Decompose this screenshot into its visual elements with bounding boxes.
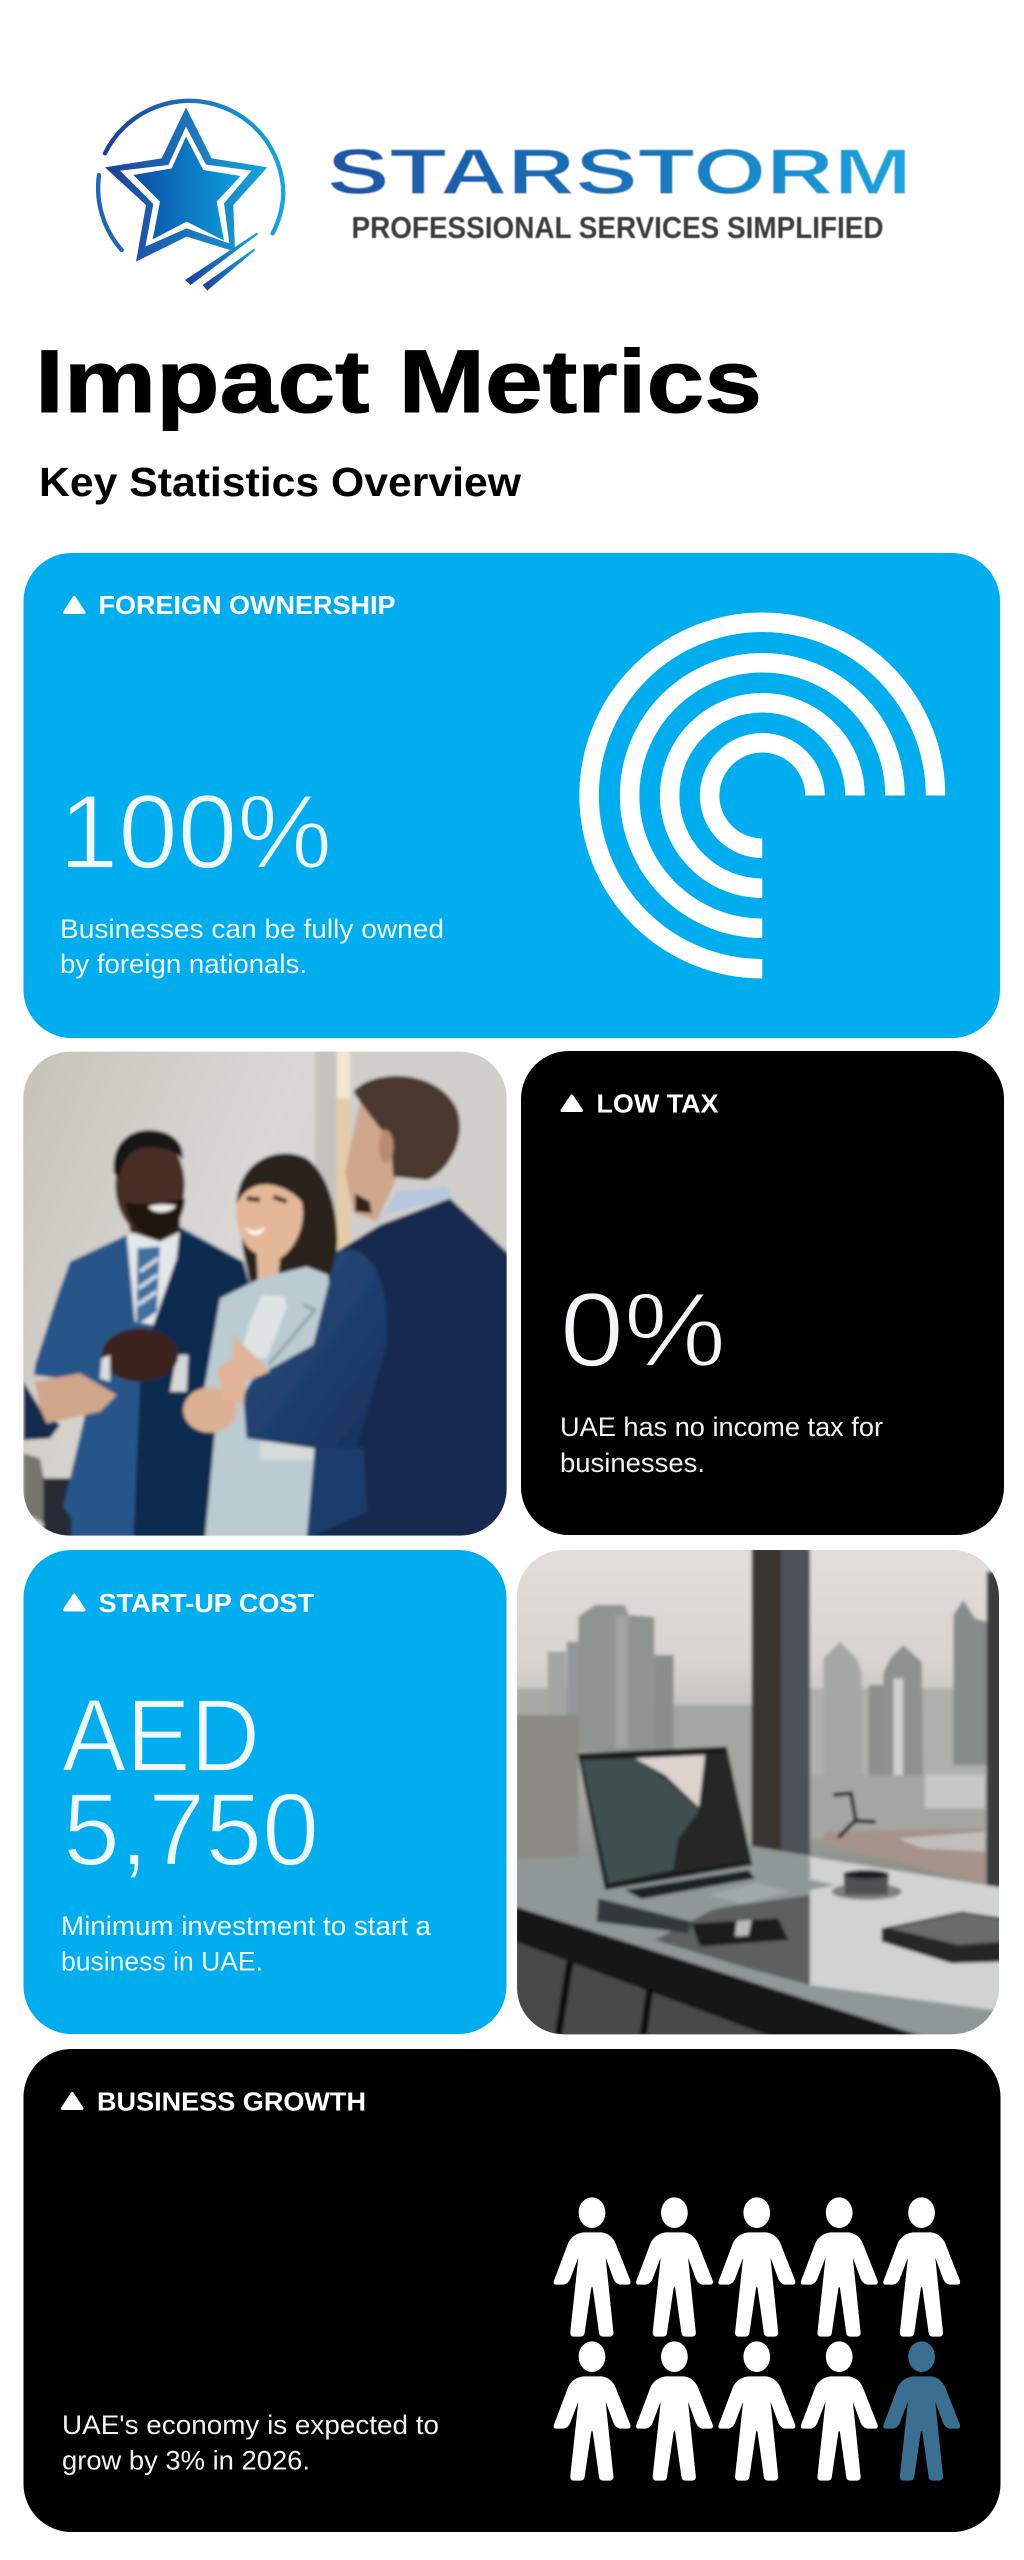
description: grow by 3% in 2026.: [62, 2446, 310, 2476]
panel: foreign ownership: [24, 553, 1000, 1038]
notebook: [882, 1912, 1005, 1963]
big number: 0%: [560, 1272, 726, 1389]
big number: 100%: [59, 774, 332, 891]
chart: pictogram of people: [554, 2197, 960, 2481]
woman face: [236, 1185, 303, 1292]
man 3 hand: [217, 1335, 270, 1405]
label: LOW TAX: [596, 1088, 719, 1118]
man 1 head: [127, 1212, 180, 1242]
man 3 head: [345, 1102, 397, 1222]
icon: star in circle: [98, 101, 283, 291]
description: businesses.: [560, 1448, 705, 1478]
icon: label triangle: [64, 1595, 84, 1610]
man 1 hands: [170, 1355, 188, 1392]
title: Impact Metrics: [35, 331, 762, 431]
left hand: [23, 1382, 60, 1440]
logo: Starstorm: [98, 101, 912, 291]
logo wordmark: STARSTORM: [327, 135, 912, 208]
photo: business people: [20, 1045, 513, 1542]
icon: label triangle: [62, 2094, 82, 2108]
big number: AED: [62, 1678, 260, 1793]
man 1 jacket: [34, 1227, 250, 1538]
laptop: [714, 1878, 834, 1910]
chart: concentric arcs: [589, 622, 936, 969]
description: business in UAE.: [61, 1946, 263, 1976]
table surface: [515, 1847, 1005, 2038]
panel: start-up cost: [24, 1550, 506, 2034]
stand: [833, 1793, 876, 1838]
label: START-UP COST: [98, 1588, 314, 1618]
window pillar: [752, 1545, 782, 1855]
panel: business growth: [24, 2049, 1000, 2532]
woman jacket: [190, 1267, 330, 1538]
subtitle: Key Statistics Overview: [39, 459, 521, 505]
description: UAE has no income tax for: [560, 1412, 883, 1442]
description: Businesses can be fully owned: [60, 914, 444, 944]
phone: [692, 1918, 788, 1947]
background chair: [23, 1452, 46, 1524]
man 3 suit: [308, 1196, 507, 1536]
right window skyline: [808, 1688, 954, 1744]
label: BUSINESS GROWTH: [97, 2086, 366, 2116]
description: by foreign nationals.: [60, 949, 307, 979]
description: UAE's economy is expected to: [62, 2410, 439, 2440]
description: Minimum investment to start a: [61, 1911, 432, 1941]
label: FOREIGN OWNERSHIP: [98, 590, 396, 620]
panel: low tax: [521, 1051, 1004, 1535]
table edge: [515, 1907, 928, 2038]
logo tagline: PROFESSIONAL SERVICES SIMPLIFIED: [352, 211, 884, 245]
cup: [832, 1883, 902, 1900]
woman hair: [237, 1153, 337, 1283]
woman hands: [183, 1387, 237, 1433]
photo: laptop on desk overlooking skyline: [515, 1545, 1005, 2038]
icon: label triangle: [64, 598, 84, 612]
big number: 5,750: [63, 1772, 319, 1887]
icon: label triangle: [562, 1096, 582, 1110]
